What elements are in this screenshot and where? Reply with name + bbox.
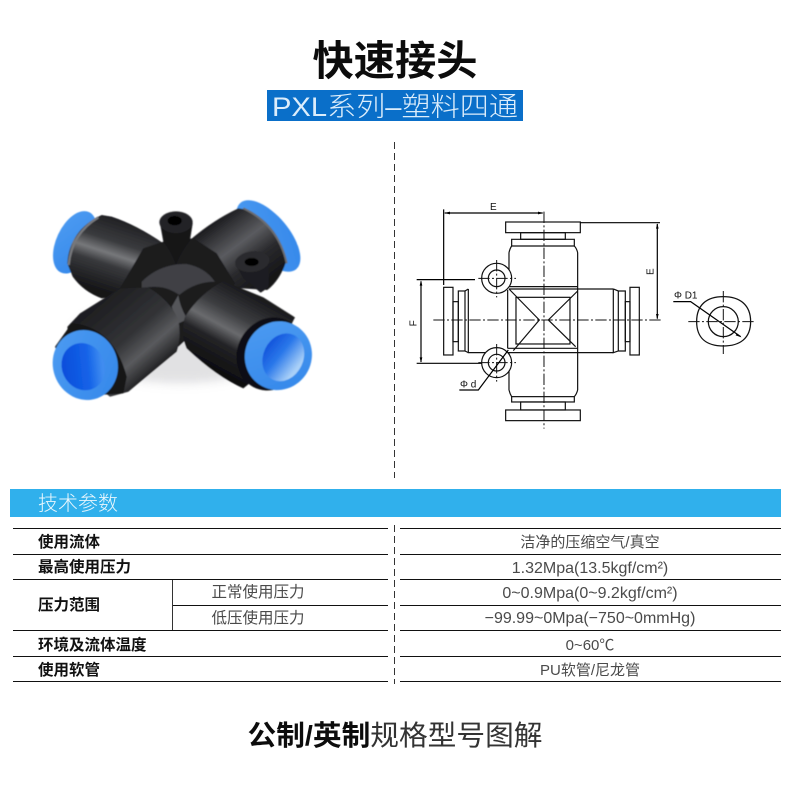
drawing body outline — [444, 222, 639, 421]
row: tubing — [38, 660, 640, 679]
dimension label phi D1: Φ D1 — [674, 290, 698, 301]
row: pressure range: 0~0.9Mpa(0~9.2kgf/cm²) — [502, 585, 678, 602]
back-left arm — [44, 204, 170, 298]
front-left arm — [43, 287, 180, 409]
section header bar — [10, 489, 781, 517]
table rules — [13, 528, 781, 682]
row: fluid: 洁净的压缩空气/真空 — [520, 533, 660, 551]
dimension label phi d: Φ d — [460, 379, 476, 390]
back-right arm — [190, 190, 312, 290]
divider: vertical dashed line upper — [394, 142, 396, 478]
dimension label E side: E — [645, 268, 656, 275]
row: tubing: 使用软管 — [38, 660, 100, 679]
row: pressure range: 低压使用压力 — [211, 609, 305, 627]
centre lines — [433, 212, 662, 429]
divider: vertical dashed line lower — [394, 525, 396, 684]
dimension label F: F — [409, 320, 420, 326]
right post — [234, 249, 271, 293]
row: temperature: 环境及流体温度 — [38, 635, 147, 654]
row: pressure range: 压力范围 — [38, 596, 100, 614]
footer heading: 公制/英制规格型号图解 — [248, 720, 542, 751]
row: fluid: 使用流体 — [38, 532, 101, 551]
row: pressure range: 正常使用压力 — [211, 583, 305, 601]
dimension arrowheads — [420, 212, 742, 363]
front-right arm — [183, 281, 324, 403]
photo: plastic four-way push-in connector — [43, 190, 324, 409]
centre body — [120, 238, 235, 347]
specification table — [13, 528, 781, 682]
dimension label E top: E — [490, 202, 497, 213]
row: tubing: PU软管/尼龙管 — [540, 662, 640, 679]
row: max pressure: 最高使用压力 — [38, 557, 131, 576]
side view — [688, 291, 754, 354]
row: pressure range — [38, 583, 695, 627]
row: max pressure: 1.32Mpa(13.5kgf/cm²) — [512, 560, 668, 577]
row: pressure range: −99.99~0Mpa(−750~0mmHg) — [485, 610, 695, 627]
dimension lines — [417, 209, 741, 390]
section header bar: 技术参数 — [38, 492, 118, 515]
row: max pressure — [38, 557, 668, 577]
subtitle banner: PXL系列–塑料四通 — [272, 92, 518, 122]
row: temperature — [38, 635, 614, 654]
title: 快速接头 — [312, 38, 478, 84]
technical drawing: front view and dimensions — [409, 202, 754, 429]
row: temperature: 0~60℃ — [566, 637, 614, 654]
row: fluid — [38, 532, 660, 551]
top post — [159, 211, 193, 264]
boss circles — [478, 260, 516, 382]
